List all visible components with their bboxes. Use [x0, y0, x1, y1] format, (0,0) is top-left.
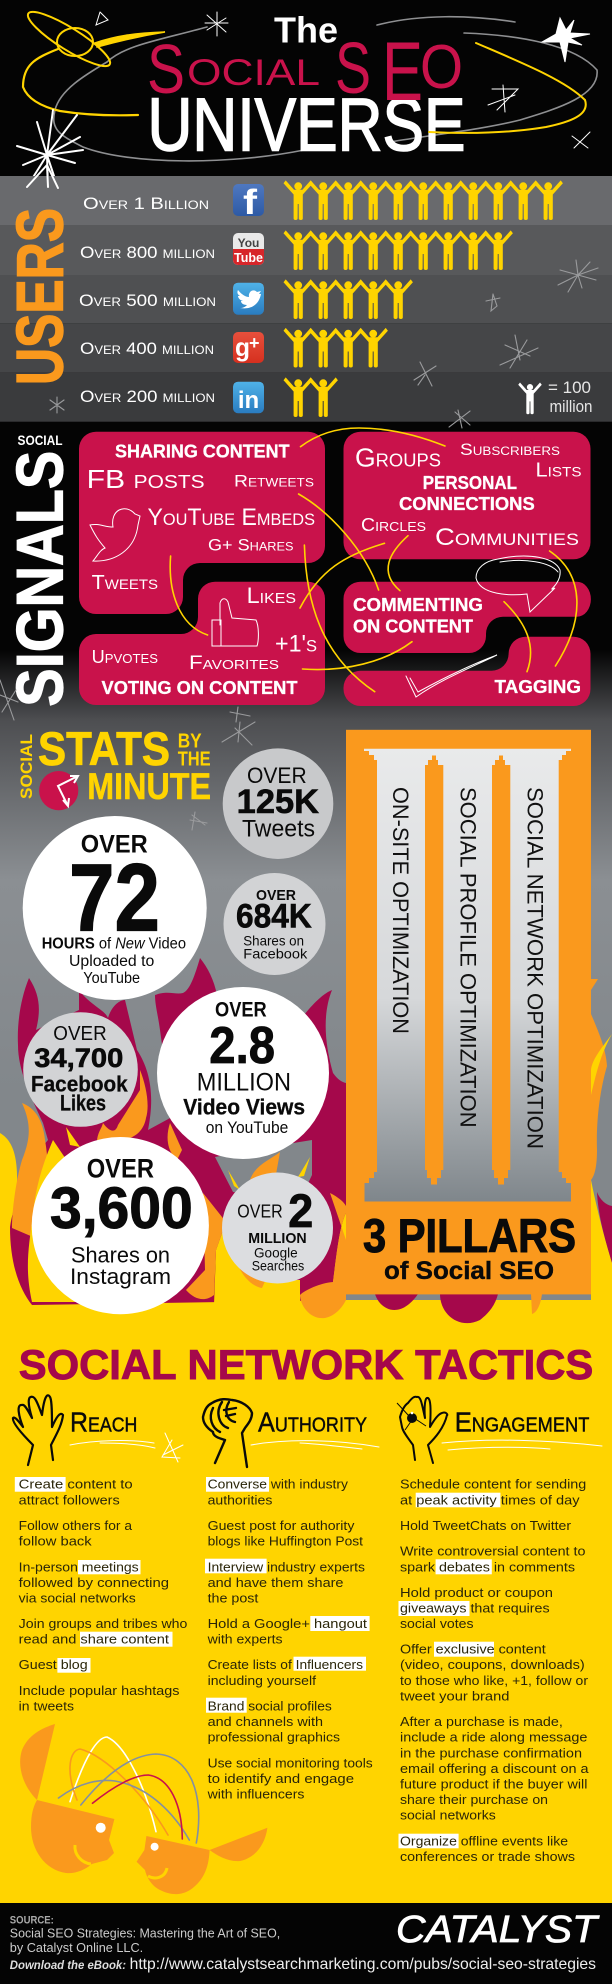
stat: 684k shares: [224, 873, 326, 975]
underline: engagement: [442, 1440, 602, 1450]
list: engagement tactics: at peak activity times of day: [400, 1493, 580, 1507]
stat: 2 million searches: [222, 1172, 333, 1284]
list: reach tactics: [15, 1477, 187, 1713]
list: engagement tactics: Hold product or coupon: [400, 1586, 553, 1600]
list: authority tactics: Use social monitoring tools: [208, 1756, 373, 1770]
list: engagement tactics: social votes: [400, 1617, 474, 1631]
heading: users: USERS: [2, 208, 76, 385]
label: lists: Lists: [536, 460, 582, 482]
stat: 72 hours of video: [23, 816, 207, 1000]
icon: scribble star: [0, 680, 250, 722]
list: authority tactics: Create lists of Influencers: [208, 1658, 363, 1672]
stat: 3,600 instagram shares: Shares on: [71, 1242, 170, 1267]
list: engagement tactics: future product if the buyer will: [400, 1778, 587, 1792]
list: authority tactics: authorities: [208, 1493, 272, 1507]
flames: [0, 958, 612, 1910]
list: engagement tactics: Offer exclusive content: [400, 1643, 546, 1657]
list: authority tactics: Interview industry experts: [208, 1560, 365, 1574]
stat: 34,700 likes: 34,700: [34, 1043, 123, 1073]
list: engagement tactics: to those who like, +1, follow or: [400, 1674, 588, 1688]
list: reach tactics: Follow others for a: [19, 1519, 132, 1533]
list: reach tactics: Join groups and tribes who: [19, 1617, 187, 1631]
icon: google plus: [233, 332, 264, 363]
chart: 500 million pictogram: [284, 279, 413, 319]
stat: 2.8 million views: OVER: [215, 998, 267, 1022]
stat: 72 hours of video: YouTube: [83, 970, 140, 987]
section: social stats heading: THE: [178, 748, 211, 770]
list: engagement tactics: (video, coupons, downloads): [400, 1658, 585, 1672]
label: +1's: +1's: [275, 631, 317, 658]
label: over 200 million: Over 200 million: [80, 387, 215, 406]
list: reach tactics: Create content to: [19, 1478, 133, 1492]
section: users: [0, 165, 612, 428]
list: engagement tactics: in the purchase confirmation: [400, 1746, 582, 1760]
heading: personal connections: [399, 473, 535, 514]
connector lines: [170, 428, 577, 692]
list: reach tactics: Guest blog: [19, 1658, 88, 1672]
heading: commenting on content: ON CONTENT: [353, 617, 473, 637]
icon: ringed planet: [22, 4, 165, 115]
panel: sharing content: [79, 432, 325, 614]
label: over 500 million: Over 500 million: [79, 291, 216, 310]
icon: thumbs up: [212, 599, 258, 646]
user rows: [0, 176, 612, 422]
list: reach tactics: attract followers: [19, 1493, 120, 1507]
label: subscribers: Subscribers: [460, 440, 560, 459]
underline: authority: [251, 1441, 379, 1449]
source heading: SOURCE:: [10, 1914, 54, 1926]
panel: 3 pillars of social seo: [346, 730, 591, 1294]
stat: 34,700 likes: Likes: [60, 1090, 106, 1116]
heading: sharing content: SHARING CONTENT: [115, 442, 290, 462]
heading: commenting on content: [353, 595, 483, 637]
label: social network optimization: SOCIAL NETWORK OPTIMIZATION: [522, 787, 548, 1149]
icon: linkedin: [233, 382, 264, 414]
heading: personal connections: CONNECTIONS: [399, 494, 535, 514]
logo: catalyst: CATALYST: [396, 1909, 600, 1951]
heading: authority: Authority: [258, 1407, 367, 1438]
section: social stats heading: SOCIAL: [17, 734, 36, 799]
label: groups: Groups: [355, 443, 441, 473]
stat: 34,700 likes: [23, 1012, 138, 1127]
list: reach tactics: In-person meetings: [19, 1560, 139, 1574]
heading: personal connections: PERSONAL: [423, 473, 517, 493]
stat: 34,700 likes: Facebook: [31, 1072, 128, 1097]
icon: google plus: g: [235, 332, 250, 362]
label: retweets: Retweets: [234, 472, 314, 491]
icon: open hand: [13, 1395, 63, 1465]
stat: 2 million searches: MILLION: [248, 1230, 307, 1247]
label: youtube embeds: YouTube Embeds: [148, 504, 315, 531]
chart: 200 million pictogram: [284, 377, 338, 417]
list: engagement tactics: [398, 1478, 589, 1864]
icon: twitter: [233, 283, 264, 315]
stat: 34,700 likes: OVER: [53, 1023, 107, 1045]
stat: 2.8 million views: MILLION: [197, 1068, 291, 1096]
list: engagement tactics: Hold TweetChats on Twitter: [400, 1519, 571, 1533]
stat: 72 hours of video: 72: [69, 845, 160, 952]
icon: pillars: [364, 749, 571, 1202]
column gaps: [425, 756, 443, 1184]
stat: 684k shares: OVER: [256, 887, 296, 904]
label: g+ shares: G+ Shares: [208, 536, 294, 555]
list: authority tactics: and channels with: [208, 1715, 323, 1729]
icon: youtube: You: [238, 236, 259, 250]
icon: white stars: [17, 12, 590, 188]
icon: hand with star: [397, 1397, 447, 1463]
header: title and space doodles: [0, 0, 612, 188]
list: engagement tactics: giveaways that requires: [400, 1602, 550, 1616]
legend: one figure equals 100 million: [518, 378, 592, 416]
icon: facebook: [233, 183, 264, 222]
star overlapping rows: [27, 165, 58, 188]
icon: youtube: Tube: [234, 251, 263, 265]
list: engagement tactics: tweet your brand: [400, 1689, 509, 1703]
legend: one figure equals 100 million: = 100: [548, 378, 591, 397]
heading: social: SOCIAL: [18, 432, 63, 448]
label: fb posts: FB posts: [87, 464, 205, 494]
label: communities: Communities: [435, 524, 579, 551]
stat: 2.8 million views: 2.8: [209, 1017, 275, 1075]
heading: The: The: [274, 10, 338, 51]
label: tweets: Tweets: [92, 572, 158, 594]
list: engagement tactics: include a ride along message: [400, 1731, 587, 1745]
icon: fist: [203, 1399, 252, 1467]
list: reach tactics: Include popular hashtags: [19, 1684, 180, 1698]
list: reach tactics: read and share content: [19, 1633, 170, 1647]
stat: 2.8 million views: on YouTube: [206, 1118, 288, 1137]
list: authority tactics: including yourself: [208, 1674, 317, 1688]
list: engagement tactics: Organize offline events like: [400, 1834, 568, 1848]
illustration: two open heads sharing ideas: [20, 1724, 267, 1894]
panel: voting on content: [79, 582, 325, 705]
list: authority tactics: Hold a Google+ hangout: [208, 1617, 368, 1631]
label: upvotes: Upvotes: [92, 647, 158, 667]
heading: social network tactics: SOCIAL NETWORK TACTICS: [19, 1341, 593, 1388]
heading: Universe: UNIVERSE: [148, 83, 466, 167]
source text: by Catalyst Online LLC.: [10, 1940, 143, 1955]
stat: 72 hours of video: Uploaded to: [69, 953, 154, 970]
list: authority tactics: with influencers: [206, 1787, 304, 1801]
panel: commenting on content: [344, 582, 591, 653]
list: engagement tactics: Schedule content for sending: [400, 1478, 586, 1492]
stat: 125k tweets: [223, 748, 333, 859]
icon: youtube: [233, 233, 264, 265]
heading: voting on content: VOTING ON CONTENT: [102, 678, 298, 698]
label: favorites: Favorites: [189, 653, 279, 674]
list: reach tactics: in tweets: [19, 1699, 74, 1713]
icon: white scribble star: [162, 1433, 183, 1462]
label: social profile optimization: SOCIAL PROFILE OPTIMIZATION: [456, 787, 480, 1128]
heading: Social SEO: S: [335, 28, 371, 108]
heading: Social SEO: OCIAL: [187, 52, 320, 93]
list: authority tactics: blogs like Huffington Post: [208, 1535, 364, 1549]
download link: http://www.catalystsearchmarketing.com/pubs/social-seo-strategies: [130, 1956, 596, 1973]
heading: commenting on content: COMMENTING: [353, 595, 483, 615]
heading: signals: SIGNALS: [2, 451, 76, 707]
source text: [10, 1926, 280, 1955]
footer: [0, 1903, 612, 1984]
section: social stats heading: [17, 722, 255, 830]
stat: 72 hours of video: HOURS of New Video: [42, 935, 186, 952]
list: authority tactics: professional graphics: [208, 1731, 340, 1745]
list: authority tactics: and have them share: [208, 1576, 344, 1590]
chart: 800 million pictogram: [284, 230, 513, 270]
legend: one figure equals 100 million: million: [550, 397, 592, 416]
label: likes: Likes: [247, 583, 296, 608]
list: engagement tactics: email offering a discount on a: [400, 1762, 589, 1776]
orbit: yellow sweep: [429, 43, 586, 133]
stat: 2.8 million views: Video Views: [183, 1094, 305, 1120]
stat: 3,600 instagram shares: 3,600: [50, 1176, 193, 1241]
heading: 3 pillars: 3 PILLARS: [363, 1209, 576, 1262]
icon: grey stars: [50, 260, 598, 428]
section: social network tactics: [13, 1341, 602, 1894]
chart: 1 billion pictogram: [284, 180, 563, 220]
stat: 3,600 instagram shares: OVER: [87, 1153, 154, 1183]
panel: personal connections: [344, 432, 590, 559]
list: authority tactics: with experts: [206, 1633, 283, 1647]
stat: 3,600 instagram shares: [32, 1137, 209, 1314]
label: over 1 billion: Over 1 Billion: [83, 194, 209, 213]
list: engagement tactics: After a purchase is made,: [400, 1715, 563, 1729]
section: social stats heading: MINUTE: [87, 766, 211, 807]
stat: 684k shares: 684K: [236, 898, 312, 936]
list: reach tactics: follow back: [19, 1535, 93, 1549]
heading: engagement: Engagement: [455, 1407, 589, 1438]
list: reach tactics: via social networks: [19, 1592, 136, 1606]
heading: Social SEO: O: [420, 32, 463, 101]
list: authority tactics: the post: [208, 1592, 259, 1606]
stat: 3,600 instagram shares: Instagram: [70, 1264, 171, 1289]
section: social stats heading: STATS: [38, 722, 170, 775]
icon: twitter bird outline: [90, 509, 140, 561]
heading: Social SEO: [147, 24, 463, 118]
download link: Download the eBook:: [10, 1958, 126, 1972]
list: authority tactics: Converse with industry: [208, 1478, 349, 1492]
heading: reach: Reach: [70, 1407, 137, 1438]
list: engagement tactics: Write controversial content to: [400, 1545, 586, 1559]
heading: Social SEO: S: [147, 30, 185, 108]
stat: 125k tweets: OVER: [247, 763, 307, 788]
heading: tagging: TAGGING: [494, 677, 581, 697]
list: authority tactics: Guest post for authority: [208, 1519, 355, 1533]
list: engagement tactics: conferences or trade shows: [400, 1850, 575, 1864]
stat: 125k tweets: Tweets: [242, 816, 315, 842]
list: engagement tactics: social networks: [400, 1809, 496, 1823]
icon: linkedin: in: [238, 387, 259, 414]
icon: speech bubble: [476, 556, 560, 612]
panel: tagging: [344, 637, 590, 706]
subheading: of social seo: of Social SEO: [384, 1257, 554, 1285]
stat: 125k tweets: 125K: [237, 783, 319, 821]
section: social stats heading: BY: [178, 731, 202, 753]
list: engagement tactics: spark debates in comments: [400, 1560, 575, 1574]
list: authority tactics: Brand social profiles: [208, 1699, 332, 1713]
orbit lines: [54, 17, 597, 161]
source text: Social SEO Strategies: Mastering the Art of SEO,: [10, 1926, 280, 1941]
stat: 2 million searches: 2: [288, 1184, 313, 1237]
stat: 2 million searches: Searches: [252, 1258, 304, 1274]
stat: 72 hours of video: OVER: [81, 830, 148, 858]
label: on-site optimization: ON-SITE OPTIMIZATION: [388, 787, 413, 1034]
list: authority tactics: [205, 1477, 373, 1801]
list: authority tactics: to identify and engage: [208, 1772, 354, 1786]
stat: 2 million searches: Google: [254, 1245, 298, 1261]
label: over 800 million: Over 800 million: [80, 243, 215, 262]
stat: 684k shares: Shares on: [243, 932, 304, 948]
chart: 400 million pictogram: [284, 328, 388, 368]
icon: check mark: [406, 655, 497, 697]
heading: Social SEO: E: [382, 24, 423, 118]
icon: facebook: f: [243, 183, 257, 222]
underline: reach: [70, 1441, 155, 1448]
stat: 2 million searches: OVER: [237, 1200, 283, 1221]
icon: google plus: +: [249, 333, 260, 353]
label: over 400 million: Over 400 million: [80, 339, 214, 358]
stat: 684k shares: Facebook: [243, 945, 308, 961]
list: engagement tactics: share their purchase on: [400, 1793, 548, 1807]
section: social signals: [0, 428, 591, 722]
label: circles: Circles: [361, 515, 426, 535]
list: reach tactics: followed by connecting: [19, 1576, 169, 1590]
stat: 2.8 million views: [157, 987, 329, 1159]
